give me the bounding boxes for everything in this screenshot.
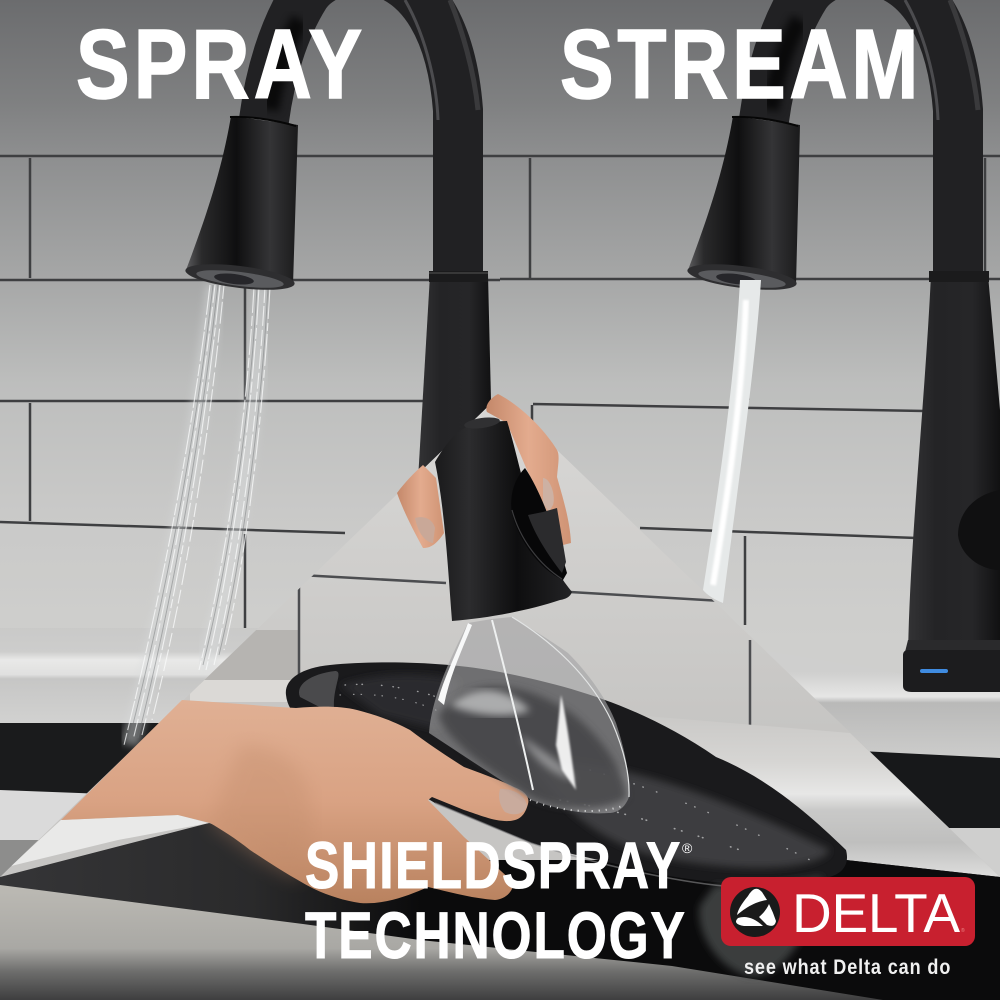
- water bell: [429, 617, 629, 813]
- spray water left: [124, 285, 270, 745]
- stream water: [703, 280, 761, 603]
- heading: ShieldSpray Technology: [305, 828, 693, 972]
- counter: [678, 724, 1000, 877]
- heading: ShieldSpray Technology: SHIELDSPRAY: [305, 828, 680, 902]
- body: [418, 275, 491, 480]
- thumb: [397, 465, 444, 548]
- tile left of grout: [204, 630, 298, 680]
- sink: [0, 823, 1000, 941]
- hand on spray head: [397, 394, 572, 621]
- heading: ShieldSpray Technology: ®: [682, 840, 693, 856]
- faucet right: [686, 0, 1000, 692]
- heading: STREAM: STREAM: [560, 9, 918, 119]
- spout arc: [264, 0, 458, 272]
- counter and sink left: [0, 628, 300, 880]
- plate: [286, 662, 847, 886]
- Delta logo: [721, 877, 975, 946]
- counter and sink right: [700, 640, 1000, 880]
- triangle panel: ShieldSpray scene: [0, 390, 1000, 1000]
- tagline: see what Delta can do: [744, 956, 950, 979]
- Delta logo: DELTA: [792, 882, 960, 944]
- icon: Delta triangle badge: [730, 887, 780, 937]
- Delta logo: ®: [961, 927, 965, 934]
- faucet left: [184, 0, 491, 480]
- thumb nail: [499, 789, 527, 814]
- fingers: [486, 394, 571, 545]
- bottom counter: [0, 885, 883, 1000]
- arm and hand holding plate: [61, 700, 528, 903]
- heading: ShieldSpray Technology: TECHNOLOGY: [305, 898, 685, 972]
- rocker switch: [511, 468, 567, 580]
- white sink rim: [11, 815, 209, 866]
- spray head: [186, 116, 298, 285]
- heading: SPRAY: SPRAY: [76, 9, 362, 119]
- head body: [435, 421, 572, 621]
